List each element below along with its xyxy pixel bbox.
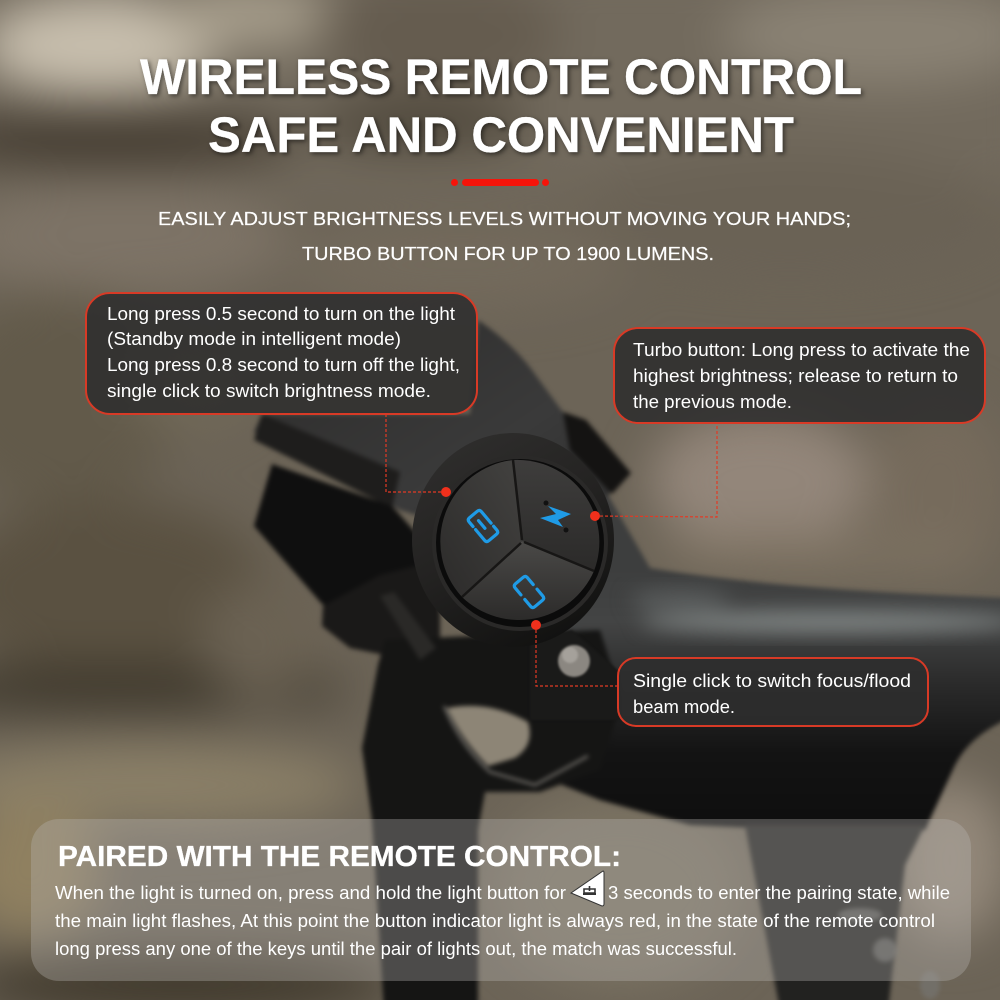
callout: turbo button: Turbo button: Long press to activate the (633, 340, 970, 360)
callout: power button: single click to switch brightness mode. (107, 381, 431, 401)
stem (362, 630, 622, 1000)
callout: power button: Long press 0.8 second to turn off the light, (107, 355, 460, 375)
callout: beam mode (618, 658, 928, 726)
title: WIRELESS REMOTE CONTROL (140, 49, 862, 105)
icon: left button (467, 509, 499, 543)
button: top right (513, 460, 599, 571)
black block (254, 464, 440, 640)
title: SAFE AND CONVENIENT (208, 107, 794, 163)
subtitle: TURBO BUTTON FOR UP TO 1900 LUMENS. (302, 244, 714, 264)
lower grip under panel (745, 825, 925, 1000)
callout: beam mode: beam mode. (633, 697, 735, 717)
callout marker dots (441, 487, 600, 630)
strap area (322, 560, 440, 660)
panel body text (55, 883, 950, 959)
clip (563, 412, 631, 494)
handlebar body (254, 320, 1000, 1000)
button: left (440, 460, 522, 597)
grip lettering (838, 908, 940, 999)
gap in stem (447, 706, 530, 766)
subtitle (158, 209, 851, 264)
callout: power button: Long press 0.5 second to turn on the light (107, 304, 455, 324)
panel heading: PAIRED WITH THE REMOTE CONTROL: (58, 841, 621, 873)
callout: power button: (Standby mode in intelligent mode) (107, 329, 401, 349)
panel body text: long press any one of the keys until the pair of lights out, the match was successful. (55, 939, 737, 959)
subtitle: EASILY ADJUST BRIGHTNESS LEVELS WITHOUT MOVING YOUR HANDS; (158, 209, 851, 229)
button dividers (462, 460, 594, 597)
wedge and silver button (530, 630, 620, 720)
title (140, 49, 862, 163)
panel body text: When the light is turned on, press and hold the light button for (55, 883, 566, 903)
button: bottom (462, 541, 594, 620)
icon: bottom button (513, 575, 545, 609)
callout: turbo button: highest brightness; release to return to (633, 366, 958, 386)
callout: power button (86, 293, 477, 414)
panel body text: 3 seconds to enter the pairing state, while (608, 883, 950, 903)
panel: pairing instructions (31, 819, 971, 981)
red accent divider (451, 179, 549, 186)
callout: turbo button: the previous mode. (633, 392, 792, 412)
outer ring (412, 433, 614, 647)
remote control device (412, 433, 614, 647)
hood upper (254, 320, 612, 560)
icon: turbo bolt (540, 500, 571, 532)
bar highlight (630, 590, 1000, 633)
callout: beam mode: Single click to switch focus/flood (633, 671, 911, 691)
callout: turbo button (614, 328, 985, 423)
metal wire (444, 706, 588, 785)
panel body text: the main light flashes, At this point the button indicator light is always red, in the state of the remote control (55, 911, 935, 931)
right bar (500, 490, 1000, 830)
callout connector lines (386, 414, 717, 686)
icon: light button (571, 871, 604, 906)
strip (254, 414, 400, 508)
